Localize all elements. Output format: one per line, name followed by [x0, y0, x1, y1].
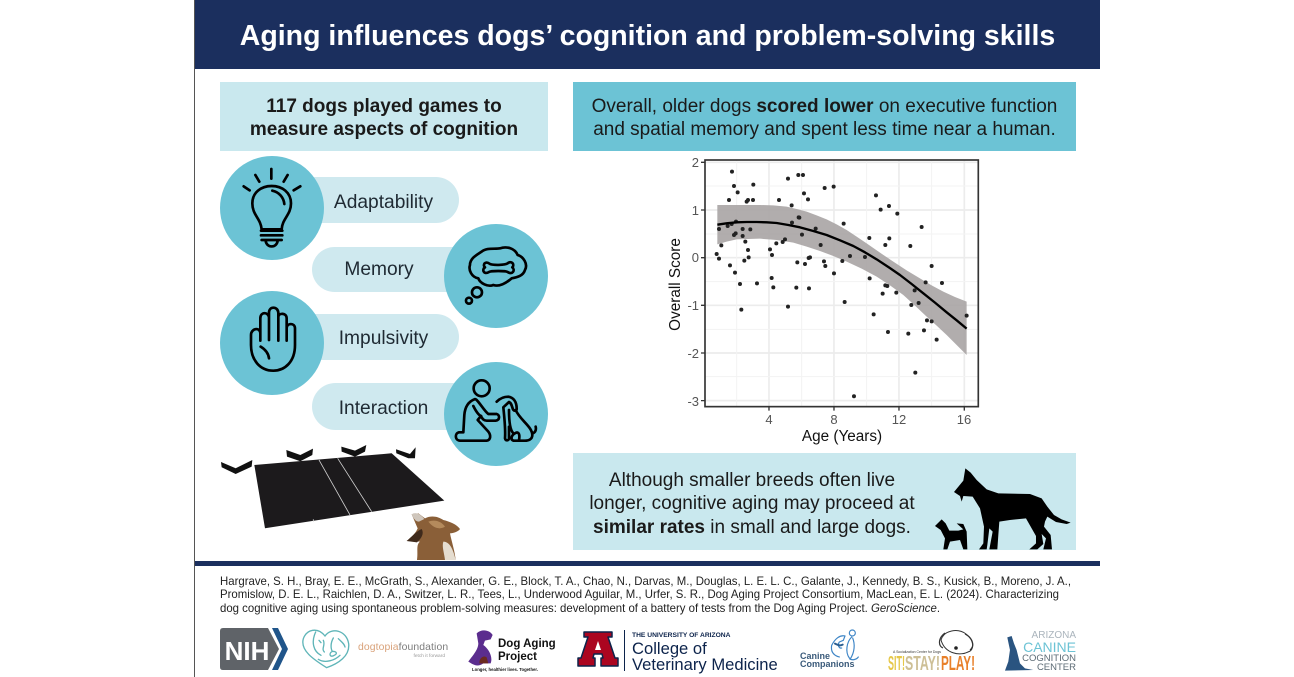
icon: dog silhouettes [935, 468, 1071, 549]
game mat [254, 453, 444, 528]
y axis tick labels [687, 155, 699, 409]
item: memory [312, 224, 548, 328]
game markers [221, 445, 416, 474]
logo: Dog Aging Project [468, 630, 556, 672]
logo: Dog Aging Project: Project [498, 651, 537, 663]
panel: 117 dogs heading: measure aspects of cognition [250, 119, 518, 140]
item: memory: Memory [344, 259, 414, 280]
logo: NIH [220, 628, 288, 670]
logo: University of Arizona College of Veterinary Medicine: Veterinary Medicine [632, 655, 778, 674]
logo: University of Arizona College of Veterinary Medicine: THE UNIVERSITY OF ARIZONA [632, 632, 731, 639]
logo: dogtopia foundation: fetch it forward [414, 653, 445, 659]
image: game board with dog [221, 445, 460, 560]
panel: 117 dogs heading: 117 dogs played games to [266, 96, 502, 117]
logo: Sit Stay Play [888, 631, 975, 675]
x axis tick labels: 12 [892, 412, 906, 427]
logo: University of Arizona College of Veterinary Medicine: College of [632, 639, 707, 658]
y axis tick labels: -2 [687, 346, 699, 361]
citation [220, 574, 1071, 615]
y axis tick labels: 1 [692, 203, 699, 218]
y axis title: Overall Score [667, 238, 684, 331]
y axis tick labels: 0 [692, 250, 699, 265]
icon: raised hand [251, 308, 295, 371]
dog looking up [407, 513, 460, 560]
citation: Hargrave, S. H., Bray, E. E., McGrath, S., Alexander, G. E., Block, T. A., Chao, N., Darvas, M., Douglas, L. E. L. C., Galante, J., Kennedy, B. S., Kusick, B., Moreno, J. A., [220, 574, 1071, 588]
logo: NIH: NIH [225, 636, 269, 666]
x axis tick labels: 8 [830, 412, 838, 427]
y axis tick labels: 2 [692, 155, 699, 170]
panel: small and large dogs [573, 453, 1076, 550]
x axis tick labels [765, 412, 971, 427]
logo: Arizona Canine Cognition Center: CANINE [1023, 639, 1076, 655]
logo: Dog Aging Project: Dog Aging [498, 638, 556, 650]
logo: University of Arizona College of Veterinary Medicine [578, 630, 778, 674]
citation: Promislow, D. E. L., Raichlen, D. A., Switzer, L. R., Tees, L., Underwood Aguilar, M., Urfer, S. R., Dog Aging Project Consortium, MacLean, E. L. (2024). Characterizing [220, 587, 1059, 601]
logo: Canine Companions: Companions [800, 659, 855, 669]
logo: Sit Stay Play: PLAY! [941, 653, 975, 675]
y axis tick labels: -3 [687, 394, 699, 409]
item: interaction: Interaction [339, 398, 428, 419]
x axis tick labels: 16 [957, 412, 971, 427]
logo: Canine Companions: Canine [800, 651, 830, 661]
item: interaction [312, 362, 548, 466]
axis ticks [701, 162, 964, 411]
logo: Arizona Canine Cognition Center [1005, 630, 1076, 673]
logo: Arizona Canine Cognition Center: COGNITION [1022, 653, 1076, 664]
logo: Sit Stay Play: A Socialization Center for Dogs [893, 650, 941, 654]
item: impulsivity [220, 291, 459, 395]
title banner [195, 0, 1100, 69]
scatter chart: overall score by age [701, 160, 978, 411]
panel: small and large dogs: similar rates in small and large dogs. [593, 517, 911, 538]
logo: Dog Aging Project: Longer, healthier lives. Together. [472, 667, 538, 672]
logo: Canine Companions [800, 630, 858, 669]
panel: overall finding heading [573, 82, 1076, 151]
confidence band [717, 205, 967, 355]
data points [715, 170, 969, 398]
citation: dog cognitive aging using spontaneous problem-solving measures: development of a battery of tests from the Dog Aging Project. GeroScience. [220, 601, 940, 615]
y axis tick labels: -1 [687, 298, 699, 313]
logo: Sit Stay Play: STAY! [905, 653, 940, 675]
x axis tick labels: 4 [765, 412, 773, 427]
panel: small and large dogs: longer, cognitive aging may proceed at [589, 493, 915, 514]
x axis title: Age (Years) [802, 428, 882, 445]
item: impulsivity: Impulsivity [339, 328, 429, 349]
logo: Arizona Canine Cognition Center: CENTER [1037, 662, 1076, 673]
panel: small and large dogs: Although smaller breeds often live [609, 470, 895, 491]
icon: person and dog [456, 380, 536, 441]
logo: Sit Stay Play: SIT! [888, 653, 905, 675]
item: adaptability: Adaptability [334, 192, 434, 213]
icon: thought bubble with bone [466, 247, 526, 304]
panel: 117 dogs heading [220, 82, 548, 151]
icon: light bulb [244, 169, 300, 246]
logo: Arizona Canine Cognition Center: ARIZONA [1032, 630, 1076, 641]
trend line [717, 222, 967, 329]
item: adaptability [220, 156, 459, 260]
title banner: Aging influences dogs’ cognition and problem-solving skills [240, 20, 1055, 52]
divider rule [195, 561, 1100, 566]
logo: dogtopia foundation: dogtopiafoundation [358, 642, 448, 653]
panel: overall finding heading: and spatial memory and spent less time near a human. [593, 119, 1056, 140]
panel: overall finding heading: Overall, older dogs scored lower on executive function [592, 96, 1057, 117]
logo: dogtopia foundation [303, 630, 448, 668]
